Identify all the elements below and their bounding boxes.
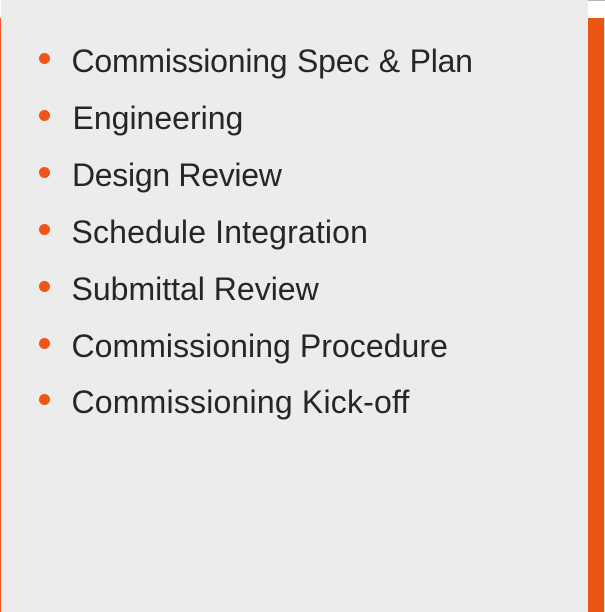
bullet list <box>39 43 473 420</box>
item: Submittal Review: Submittal Review <box>72 271 319 307</box>
item: Schedule Integration: Schedule Integration <box>72 214 368 250</box>
left edge white strip <box>0 0 1 18</box>
right white block <box>588 0 605 18</box>
item: Commissioning Spec & Plan: Commissioning Spec & Plan <box>72 43 473 79</box>
item: Commissioning Kick-off: Commissioning Kick-off <box>72 384 410 420</box>
left edge orange strip <box>0 18 1 612</box>
item: Commissioning Procedure: Commissioning Procedure <box>72 328 448 364</box>
item: Design Review: Design Review <box>72 157 282 193</box>
right edge light strip <box>604 18 605 612</box>
right orange bar <box>588 18 604 612</box>
item: Engineering: Engineering <box>72 100 243 136</box>
